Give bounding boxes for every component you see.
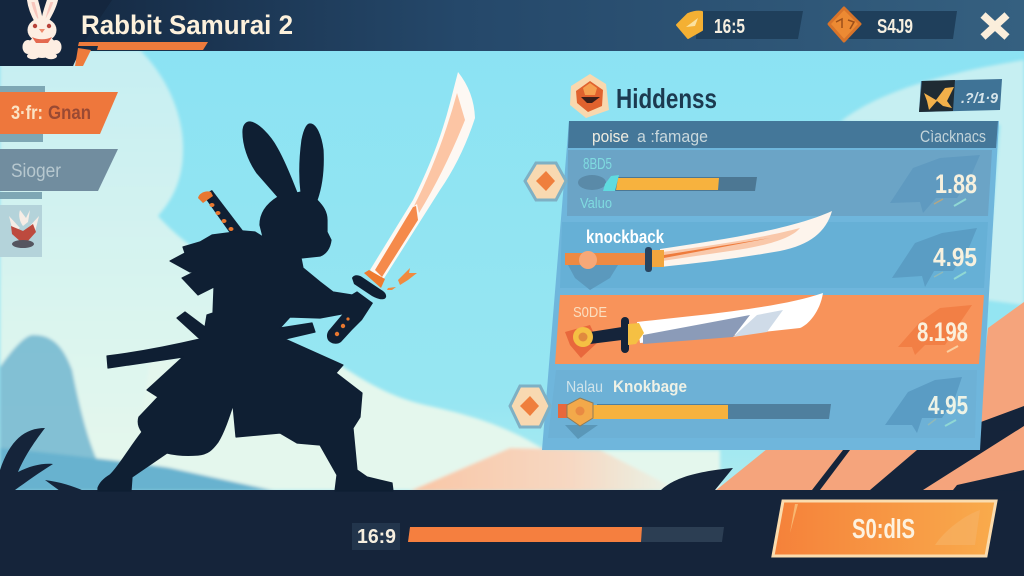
row: highlighted blade: S0DE	[573, 304, 607, 321]
inactive tab	[0, 149, 118, 191]
inactive tab: Sioger	[11, 161, 62, 182]
row: first stat: 1.88	[935, 169, 977, 199]
panel body	[542, 121, 999, 450]
panel heading: Hiddenss	[616, 83, 717, 114]
stat chip: time: 16:5	[714, 16, 745, 38]
active tab: Gnan	[48, 103, 91, 124]
panel header row	[568, 121, 998, 148]
title accent mark	[75, 48, 91, 66]
active tab	[0, 92, 118, 134]
row: first stat	[567, 150, 992, 216]
stat chip: currency: S4J9	[877, 16, 913, 38]
progress label: 16:9	[357, 526, 396, 548]
progress label	[352, 523, 400, 550]
row: first stat: Valuo	[580, 195, 612, 212]
row: knockback: knockback	[586, 227, 665, 247]
row: fourth stat	[548, 370, 977, 439]
back sword handle	[198, 190, 244, 236]
sparks	[387, 268, 417, 290]
rabbit samurai silhouette	[98, 72, 475, 491]
sword: knockback	[565, 211, 832, 272]
icon: rabbit mascot	[22, 0, 62, 59]
hexagon marker: fourth stat	[510, 386, 550, 427]
stat chip: currency	[829, 8, 957, 41]
panel header row: poise	[592, 127, 629, 146]
top bar	[0, 0, 1024, 66]
hexagon marker: first stat	[525, 163, 566, 200]
panel header row: a :famage	[637, 127, 708, 146]
panel heading icon	[570, 74, 609, 118]
sword: highlighted blade	[565, 293, 823, 358]
ground	[0, 490, 1024, 576]
foreground plants	[0, 406, 1024, 491]
row: fourth stat: Nalau	[566, 379, 603, 396]
tab item icon	[0, 205, 42, 257]
stat chip: time	[677, 11, 803, 39]
row: fourth stat: Knokbage	[613, 377, 687, 396]
tab backing strips	[0, 86, 45, 199]
panel header row: Cìacknacs	[920, 127, 986, 146]
progress bar	[352, 523, 724, 550]
row: highlighted blade	[555, 293, 984, 364]
row: knockback	[560, 211, 988, 290]
row: fourth stat: 4.95	[928, 390, 968, 420]
side tabs	[0, 86, 118, 257]
icon: close	[983, 15, 1007, 37]
action button: S0:dIS	[852, 513, 915, 544]
row: first stat: 8BD5	[583, 156, 612, 173]
katana	[327, 72, 475, 344]
panel badge: .?/1·9	[961, 90, 999, 107]
title accent stripe	[78, 42, 208, 50]
title: Rabbit Samurai 2	[81, 10, 293, 40]
panel badge	[919, 79, 1002, 112]
active tab: 3·fr:	[11, 103, 43, 124]
row: knockback: 4.95	[933, 242, 977, 272]
panel: hidden stats	[510, 74, 1002, 450]
action button	[773, 501, 996, 556]
row: highlighted blade: 8.198	[917, 317, 968, 347]
